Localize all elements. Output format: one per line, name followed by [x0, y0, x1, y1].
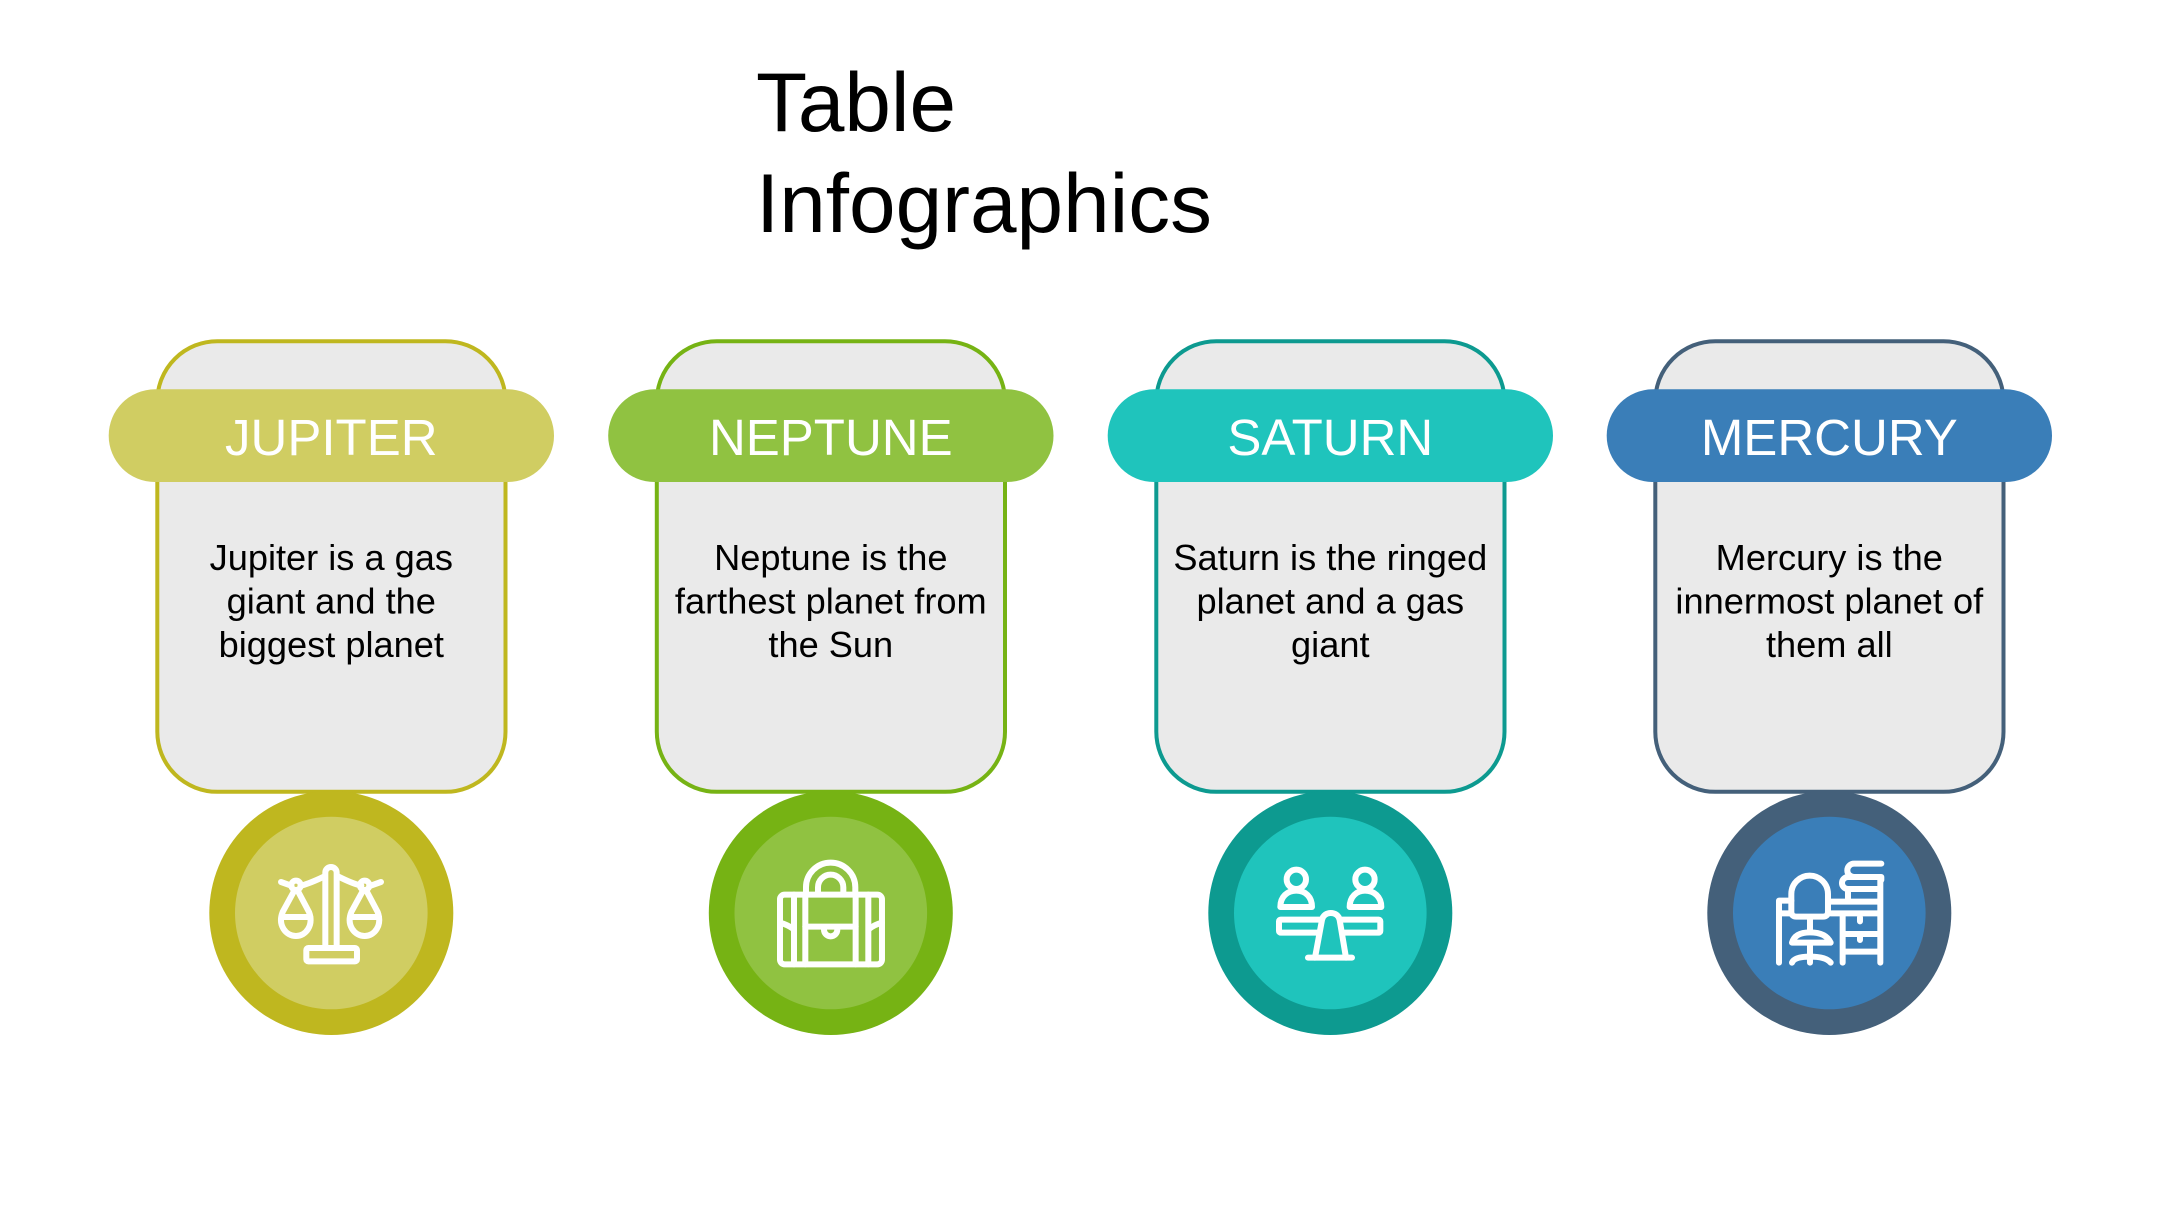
description: saturn: planet and a gas: [1196, 580, 1464, 621]
title: Infographics: [756, 156, 1212, 250]
heading: jupiter: JUPITER: [225, 409, 438, 466]
pill: mercury: [1607, 389, 2052, 482]
title: [756, 55, 1212, 250]
title: Table: [756, 55, 956, 149]
pill: saturn: [1108, 389, 1553, 482]
circle: saturn: [1208, 791, 1452, 1035]
card: saturn: [1156, 341, 1504, 792]
icon: seesaw: [1279, 870, 1381, 958]
heading: mercury: MERCURY: [1701, 409, 1958, 466]
icon: scales: [281, 867, 381, 961]
icon: desk: [1779, 864, 1881, 963]
description: jupiter: biggest planet: [219, 624, 444, 665]
description: jupiter: Jupiter is a gas: [210, 537, 453, 578]
description: saturn: Saturn is the ringed: [1173, 537, 1487, 578]
description: jupiter: giant and the: [227, 580, 436, 621]
card: mercury: [1655, 341, 2004, 792]
card: neptune: [657, 341, 1005, 792]
description: saturn: giant: [1291, 624, 1370, 665]
circle: jupiter: [209, 791, 453, 1035]
description: neptune: the Sun: [768, 624, 893, 665]
heading: neptune: NEPTUNE: [709, 409, 953, 466]
panel: neptune: [608, 341, 1054, 1035]
pill: jupiter: [109, 389, 554, 482]
heading: saturn: SATURN: [1227, 409, 1433, 466]
panel: jupiter: [109, 341, 554, 1035]
card: jupiter: [157, 341, 506, 792]
description: mercury: innermost planet of: [1675, 580, 1984, 621]
panel: saturn: [1108, 341, 1553, 1035]
pill: neptune: [608, 389, 1054, 482]
description: mercury: them all: [1766, 624, 1893, 665]
circle: neptune: [709, 791, 953, 1035]
description: mercury: Mercury is the: [1716, 537, 1943, 578]
description: neptune: Neptune is the: [714, 537, 947, 578]
icon: briefcase: [780, 863, 882, 964]
description: neptune: farthest planet from: [675, 580, 987, 621]
panel: mercury: [1607, 341, 2052, 1035]
circle: mercury: [1707, 791, 1951, 1035]
